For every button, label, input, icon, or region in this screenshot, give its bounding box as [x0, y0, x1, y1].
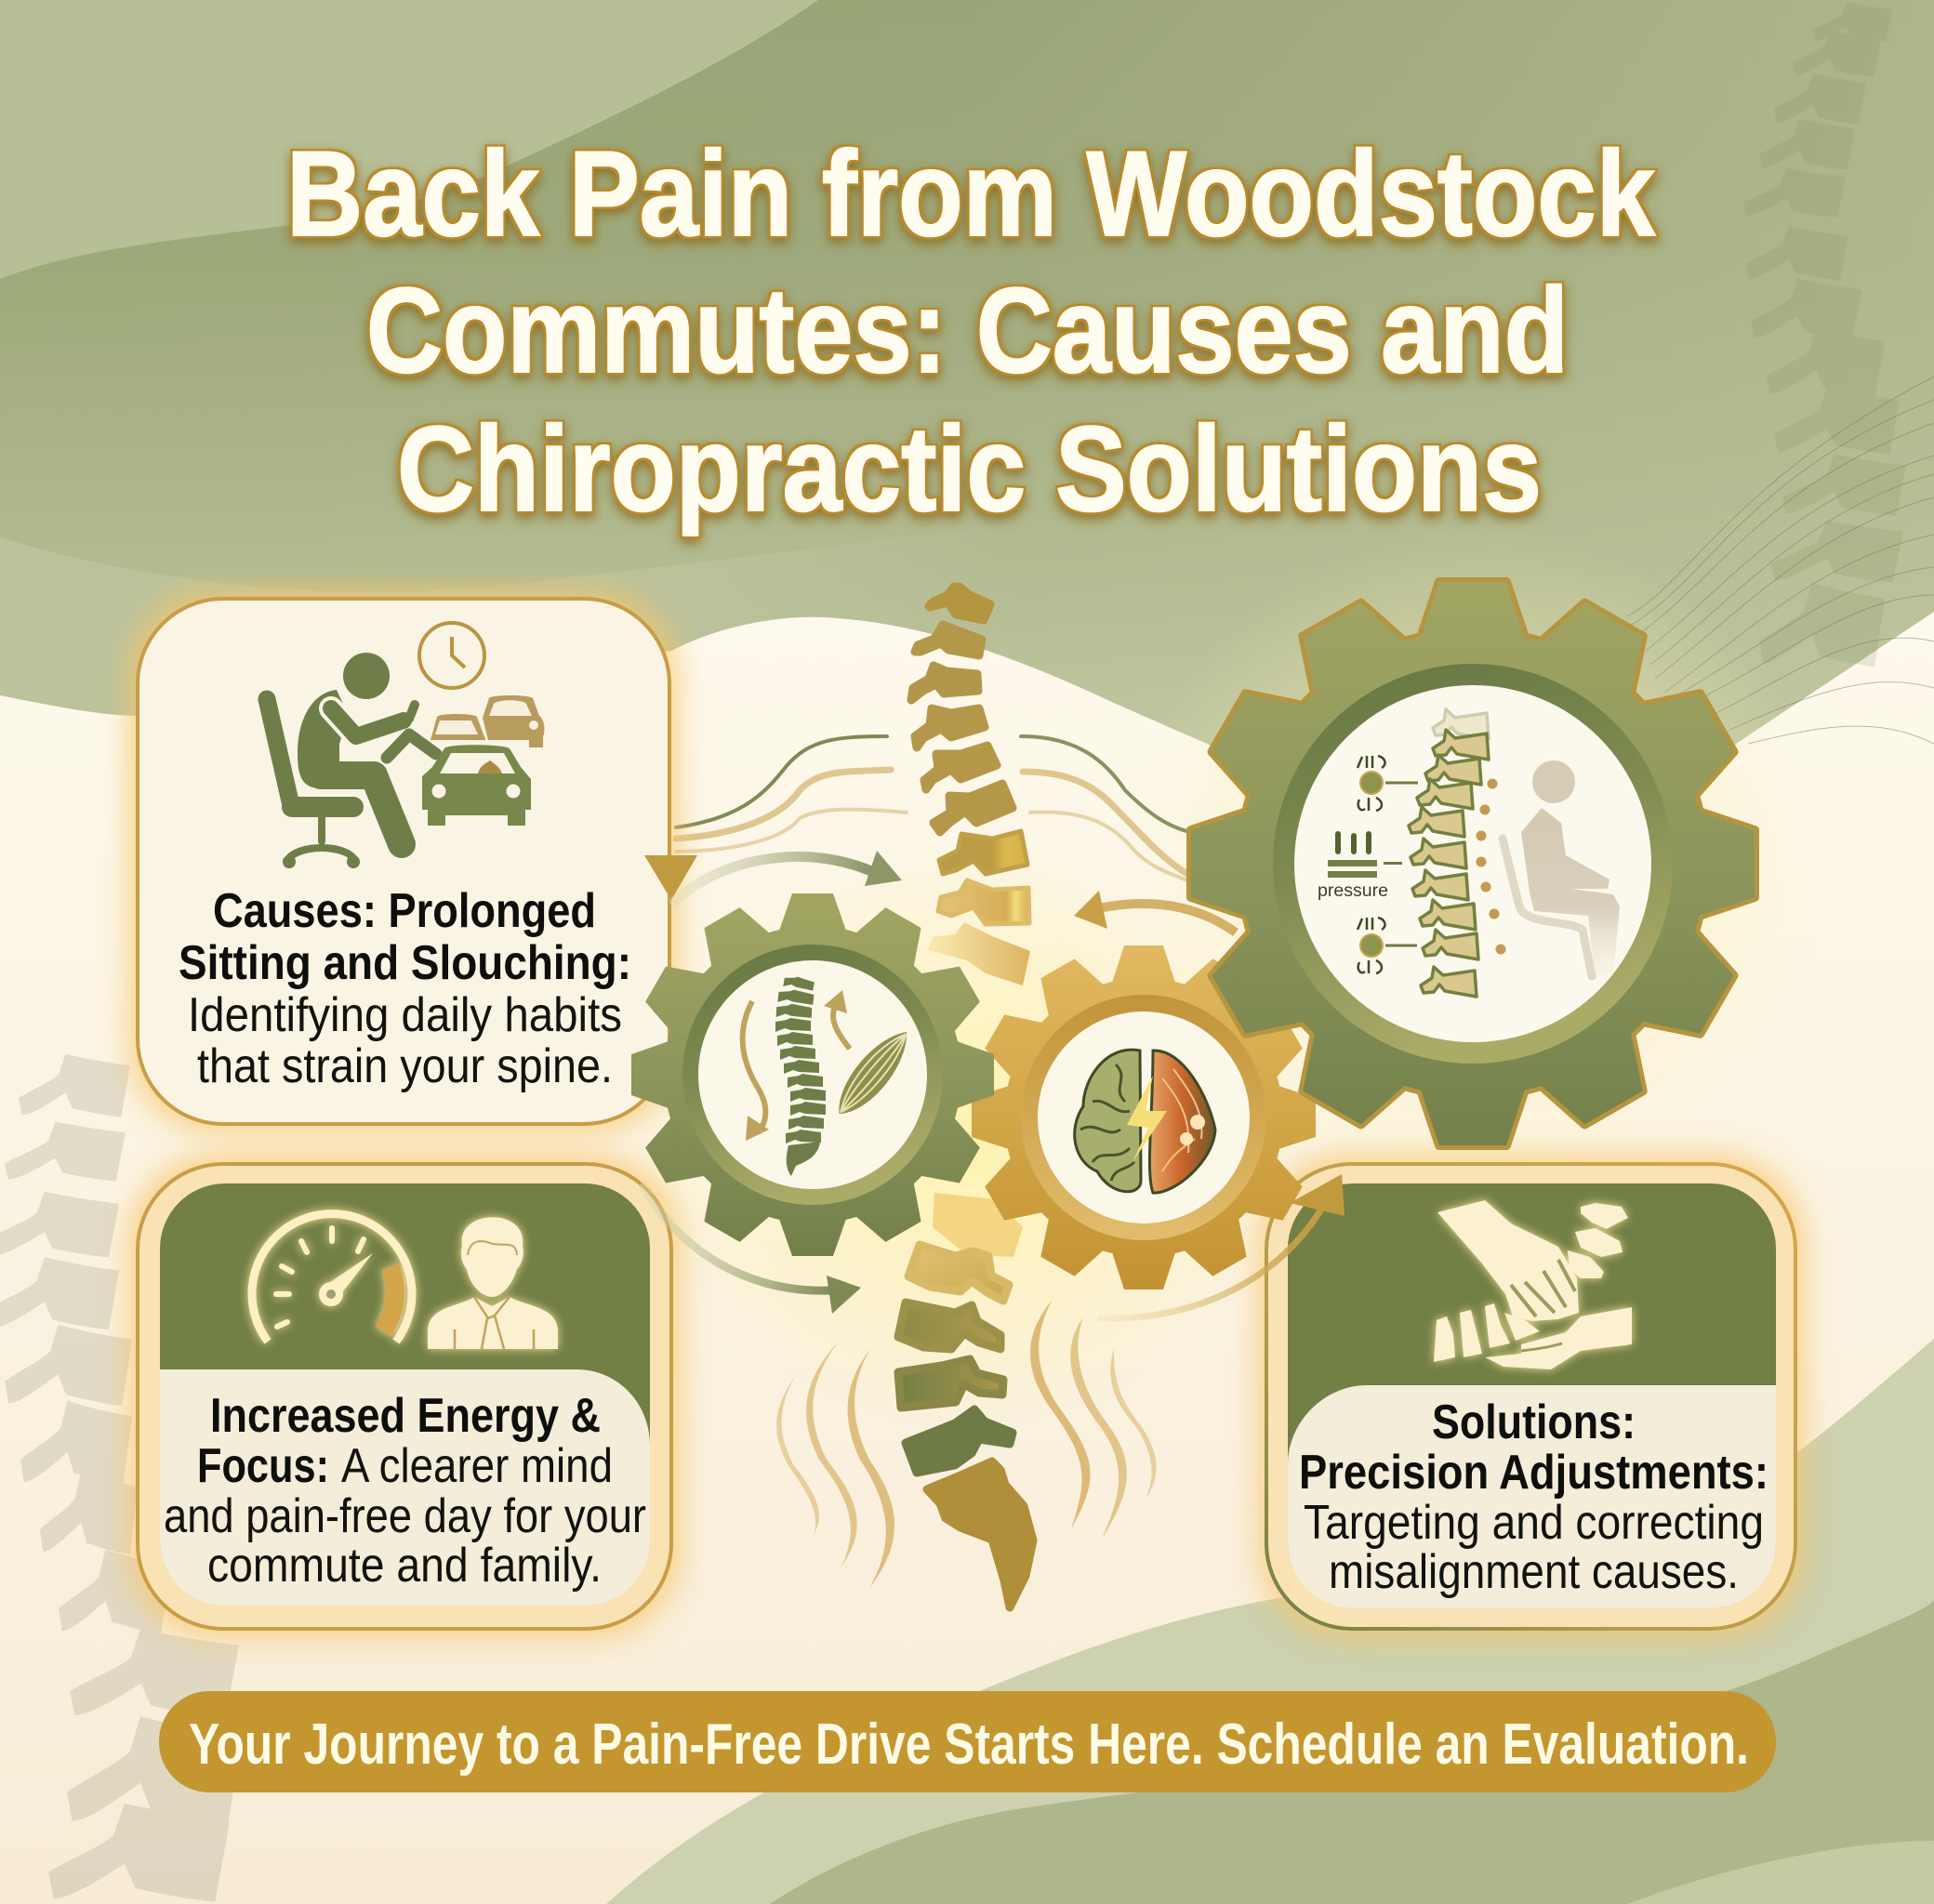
text: causes: Sitting and Slouching:: [179, 936, 631, 990]
icon: commuter sitting in traffic: [267, 623, 544, 868]
gear: olive with spine and muscle: [627, 889, 999, 1261]
text: solutions: Solutions:: [1432, 1395, 1636, 1449]
nerve markers: [1358, 756, 1418, 973]
icon: brain and muscle: [1075, 1050, 1215, 1193]
text: increased energy: [164, 1389, 646, 1593]
text: solutions: Precision Adjustments:: [1299, 1446, 1768, 1500]
watermark spine left: [0, 1054, 242, 1902]
squiggle motion lines: [776, 1300, 1157, 1588]
gear: gold with brain and muscle: [967, 941, 1320, 1294]
gear: large olive with spine diagram: [1175, 566, 1770, 1161]
panel: solutions: [1266, 1164, 1795, 1629]
title: Commutes: Causes and: [366, 262, 1569, 398]
arrow: gold arc from large gear: [1074, 891, 1236, 932]
text: increased energy: and pain-free day for your: [164, 1489, 646, 1543]
seated figure: [1503, 760, 1620, 976]
text: increased energy: A clearer mind: [341, 1439, 613, 1493]
watermark spine right: [1743, 2, 1906, 667]
card glow halos: [130, 591, 1803, 1636]
icon: mini spine: [775, 974, 826, 1176]
title: Back Pain from Woodstock: [286, 126, 1656, 261]
arrow: olive arc from lower gear to spine: [642, 1183, 861, 1314]
panel: causes: [138, 599, 669, 1124]
spine diagram dots: [1477, 779, 1506, 954]
central spine: [898, 587, 1033, 1607]
call to action banner: [159, 1691, 1776, 1792]
title: Chiropractic Solutions: [397, 401, 1542, 536]
arrow: olive arc into spine: [671, 851, 902, 905]
arrow: gold arc into solutions: [1097, 1174, 1345, 1318]
title: [286, 126, 1656, 536]
text: increased energy: Increased Energy &: [210, 1389, 601, 1443]
icon: business person: [428, 1217, 558, 1349]
text: solutions: Targeting and correcting: [1304, 1496, 1764, 1550]
text: causes: that strain your spine.: [197, 1039, 613, 1093]
text: causes: Identifying daily habits: [188, 988, 622, 1042]
text: increased energy: commute and family.: [207, 1539, 602, 1593]
central glow: [632, 530, 1832, 1432]
arrow: down from causes: [644, 855, 697, 900]
thin flowing lines from gear: [1627, 377, 1934, 744]
text: solutions: misalignment causes.: [1329, 1545, 1739, 1599]
panel: increased energy: [138, 1164, 671, 1629]
text: solutions: [1299, 1395, 1768, 1599]
icon: movement arrows: [743, 990, 850, 1141]
flowing ribbons beside spine: [676, 736, 1195, 883]
text: causes: [179, 884, 631, 1093]
icon: speedometer: [252, 1214, 412, 1342]
text: increased energy: Focus:: [197, 1439, 329, 1493]
pressure icon: [1318, 834, 1402, 901]
icon: adjusting hands and spine: [1434, 1200, 1632, 1369]
pressure icon: pressure: [1318, 881, 1388, 901]
text: causes: Causes: Prolonged: [213, 884, 596, 938]
icon: muscle: [826, 1022, 921, 1124]
spine diagram: [1409, 709, 1489, 997]
